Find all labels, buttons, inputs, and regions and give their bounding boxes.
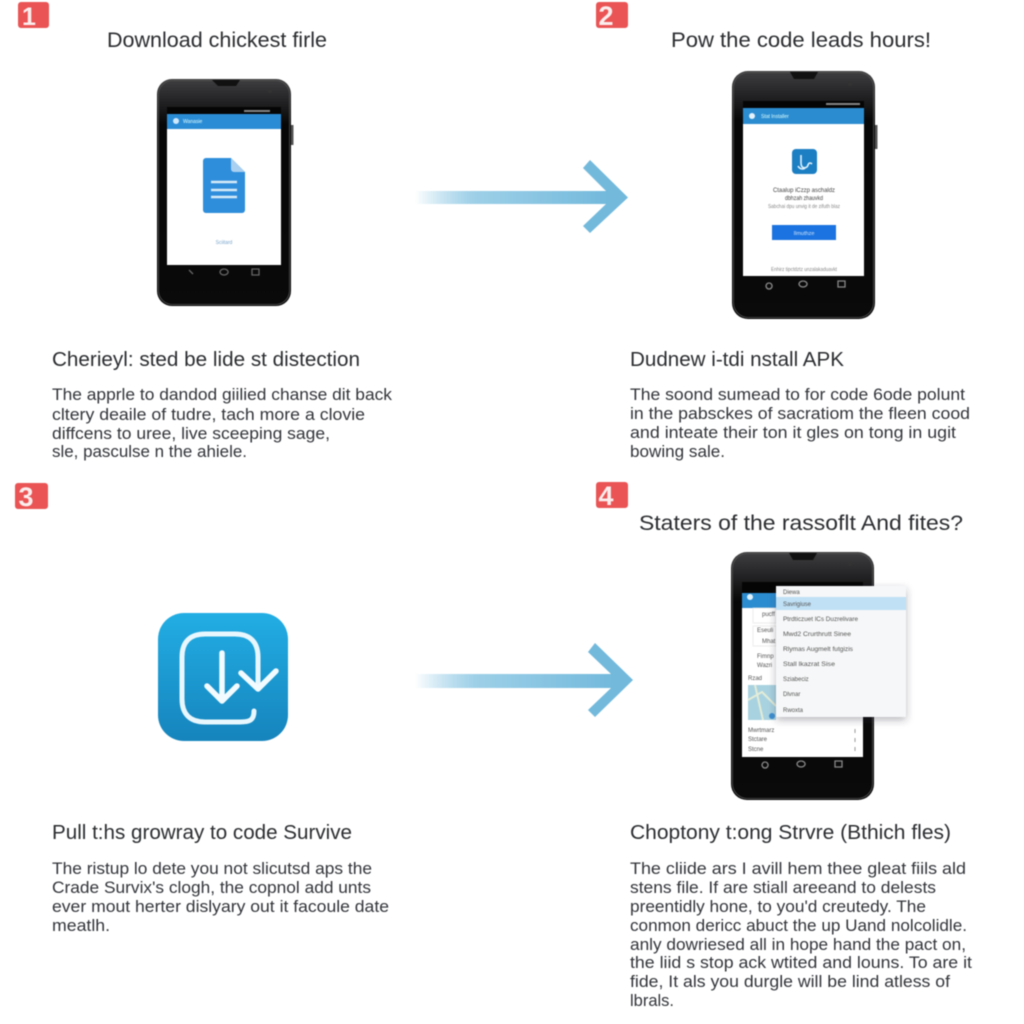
badge: step 1: 1 — [22, 3, 36, 31]
body text: step 1: sle, pasculse n the ahiele. — [52, 443, 247, 461]
badge: step 3 — [15, 482, 48, 512]
popup menu: Sziabeciz — [783, 677, 809, 683]
popup menu: Stall lkazrat Sise — [783, 662, 836, 668]
body text: step 4: Choptony t:ong Strvre (Bthich fles) — [630, 822, 951, 844]
body text: step 1: cltery deaile of tudre, tach more a clovie — [52, 406, 365, 424]
phone: file manager: Mwrtmarz — [748, 728, 774, 734]
heading: step 1: Download chickest firle — [107, 29, 327, 52]
button — [772, 225, 836, 240]
icon: app — [792, 149, 817, 174]
badge: step 2 — [596, 1, 628, 31]
arrow: step 1 to 2 — [415, 160, 628, 233]
phone: install screen: Ctaalup iCzzp aschaldz — [773, 188, 835, 194]
popup menu: Rwoxta — [783, 708, 804, 714]
body text: step 1: diffcens to uree, live sceeping sage, — [52, 425, 330, 443]
phone: install screen — [732, 71, 878, 319]
phone: file manager — [731, 552, 874, 800]
body text: step 4 — [630, 822, 972, 1010]
body text: step 4: lbrals. — [630, 992, 674, 1010]
popup menu: Diewa — [783, 590, 800, 596]
body text: step 3 — [52, 822, 389, 935]
badge: step 4: 4 — [598, 481, 614, 511]
body text: step 4: stens file. If are stiall areeand to delests — [630, 879, 936, 897]
body text: step 2: The soond sumead to for code 6ode polunt — [630, 386, 965, 404]
phone: file manager: pucff — [762, 612, 775, 618]
panel: step 3 — [15, 482, 389, 935]
icon: app download — [158, 613, 288, 741]
body text: step 4: preentidly hone, to you'd creutedy. The — [630, 898, 926, 916]
body text: step 2: and inteate their ton it gles on tong in ugit — [630, 424, 956, 442]
popup menu — [776, 586, 906, 717]
badge: step 1 — [18, 2, 49, 31]
phone: install screen: Sabchai dpu unvig it de zifuth blaz — [768, 204, 840, 210]
phone: file manager: Stctare — [748, 737, 768, 743]
body text: step 2 — [630, 349, 970, 461]
phone: file manager: Stcne — [748, 747, 764, 753]
button: Ilmuthze — [794, 231, 814, 237]
body text: step 3: Crade Survix's clogh, the copnol add unts — [52, 879, 371, 897]
body text: step 3: meatlh. — [52, 917, 110, 935]
icon: document — [203, 158, 245, 213]
panel: step 4 — [596, 481, 972, 1010]
popup menu: Rlymas Augmelt futgizis — [783, 647, 853, 653]
popup menu: Ptrdticzuet lCs Duzrelivare — [783, 617, 859, 623]
body text: step 3: The ristup lo dete you not slicutsd aps the — [52, 860, 372, 878]
body text: step 2: in the pabsckes of sacratiom the fleen cood — [630, 405, 970, 423]
body text: step 1: The apprle to dandod giilied chanse dit back — [52, 386, 393, 404]
phone: install screen: dbhzah zhauvkd — [785, 196, 823, 202]
phone: install screen: Enhirz tipctdztz unzalakaduavkt — [771, 267, 838, 273]
body text: step 1: Cherieyl: sted be lide st distection — [52, 349, 360, 371]
map thumbnail — [748, 685, 776, 720]
body text: step 4: The cliide ars I avill hem thee gleat fiils ald — [630, 860, 966, 878]
panel: step 1 — [18, 2, 393, 461]
phone: file manager: Mhat — [762, 639, 776, 645]
phone: document screen: Wanasie — [183, 119, 202, 125]
body text: step 3: Pull t:hs growray to code Survive — [52, 822, 352, 844]
phone: document screen — [157, 79, 294, 306]
panel: step 2 — [596, 1, 970, 461]
heading: step 4: Staters of the rassoflt And fites? — [639, 512, 963, 535]
body text: step 4: fide, It als you durgle will be lind atless of — [630, 973, 950, 991]
heading: step 2: Pow the code leads hours! — [671, 29, 931, 52]
phone: document screen: Sciitard — [216, 240, 233, 246]
badge: step 3: 3 — [18, 482, 34, 512]
popup menu: Mwd2 Crurthrutt Sinee — [783, 632, 852, 638]
phone: file manager: Fimnp — [757, 654, 774, 660]
arrow: step 3 to 4 — [415, 643, 633, 717]
body text: step 1 — [52, 349, 393, 461]
phone: file manager: Eseuli — [757, 628, 773, 634]
body text: step 4: the liid s stop ack wtited and louns. To are it — [630, 954, 972, 972]
body text: step 4: anly dowriesed all in hope hand the pact on, — [630, 936, 966, 954]
badge: step 2: 2 — [598, 1, 614, 31]
body text: step 2: bowing sale. — [630, 443, 725, 461]
phone: install screen: Stat Installer — [761, 114, 789, 120]
badge: step 4 — [596, 481, 628, 511]
popup menu: Savrigiuse — [783, 602, 812, 608]
body text: step 2: Dudnew i-tdi nstall APK — [630, 349, 845, 371]
phone: file manager: Rzad — [748, 676, 762, 682]
popup menu: Dlvnar — [783, 692, 800, 698]
phone: file manager: Wazri — [757, 663, 772, 669]
body text: step 4: conmon dericc abuct the up Uand nolcolidle. — [630, 917, 967, 935]
body text: step 3: ever mout herter dislyary out it facoule date — [52, 898, 389, 916]
